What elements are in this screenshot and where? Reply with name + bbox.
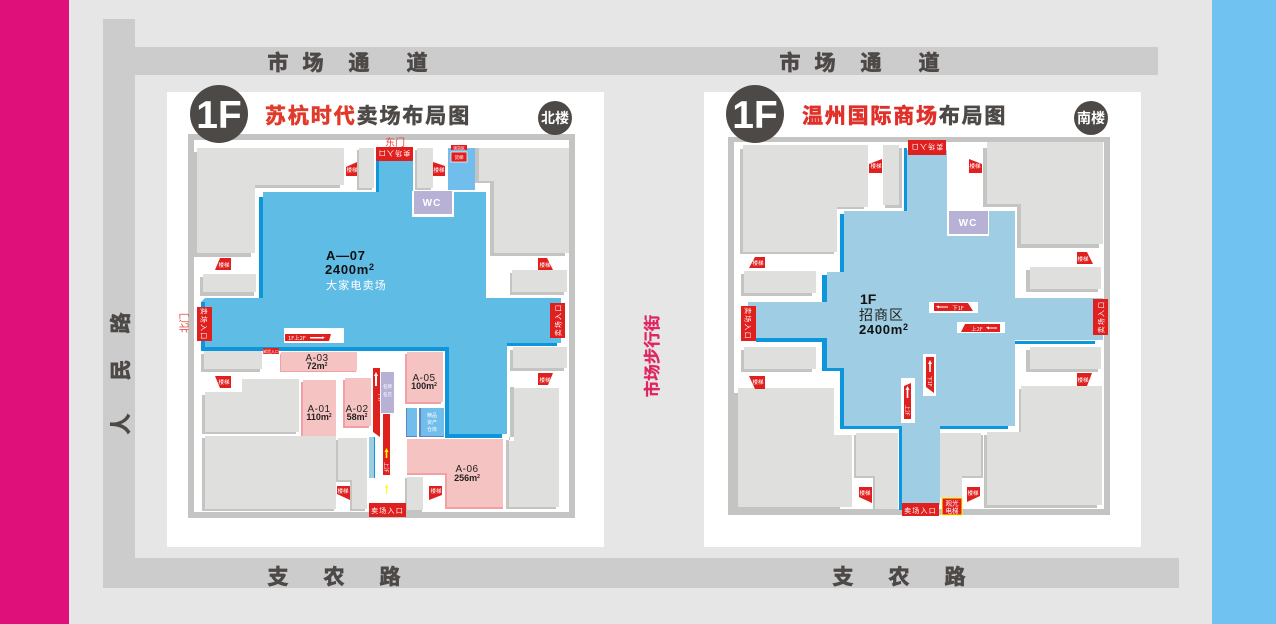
unit A-06: A-06 xyxy=(455,464,479,475)
entrance bottom xyxy=(902,503,939,516)
entrance top xyxy=(376,147,413,161)
escalator sign 上2F horizontal: 上2F xyxy=(971,325,983,333)
WC xyxy=(947,210,989,236)
label: 1F 招商区: 1F xyxy=(860,291,877,307)
stair icons: 楼梯 xyxy=(1077,255,1089,263)
road label: 市场通道 east: 通 xyxy=(860,47,882,77)
stair icons: 楼梯 xyxy=(337,487,349,495)
sightseeing elevator xyxy=(942,498,962,515)
WC xyxy=(412,191,454,217)
entrance right: 卖场入口 xyxy=(554,304,564,336)
storage block: 领货区 xyxy=(453,144,465,152)
sales area blue edge lines xyxy=(201,155,557,438)
road label: 支农路 east xyxy=(832,561,966,591)
label: A-07: A—07 xyxy=(326,248,366,263)
escalator sign 上2F vertical: 上2F xyxy=(904,405,910,416)
entrance top: 卖场入口 xyxy=(911,142,943,152)
badge: 南楼 xyxy=(1074,101,1108,135)
entrance bottom xyxy=(369,503,406,517)
panel: south building floor plan xyxy=(704,85,1141,547)
entrance right xyxy=(1093,299,1108,335)
unit A-05 xyxy=(405,352,443,404)
entrance left xyxy=(197,307,212,341)
unit A-03 xyxy=(280,352,357,372)
badge: 1F: 1F xyxy=(196,94,242,137)
unit A-06 xyxy=(407,439,503,509)
leasing area blue edge lines xyxy=(756,148,1095,510)
stair icons: 楼梯 xyxy=(430,487,442,495)
badge: 北楼 xyxy=(538,101,572,135)
road label: 市场通道 east: 道 xyxy=(918,47,940,77)
heading: 苏杭时代卖场布局图: 苏杭时代卖场布局图 xyxy=(265,100,471,130)
road label: 人民路: 人 xyxy=(105,414,135,434)
storage rooms: 精品 xyxy=(427,412,437,419)
road label: 支农路 east: 路 xyxy=(944,561,966,591)
road label: 人民路: 路 xyxy=(105,312,135,334)
storage block: 货梯 xyxy=(454,154,464,161)
gray building blocks xyxy=(194,148,569,512)
label: A-07: 2 xyxy=(369,262,375,272)
unit A-03: A-03 xyxy=(305,353,329,364)
north gate label: 北门 xyxy=(176,313,191,333)
badge: 1F xyxy=(726,85,784,143)
label: A-07: 2400m xyxy=(325,262,369,277)
road label: 市场通道 east: 市 xyxy=(780,47,800,77)
central escalator and display: 上2F xyxy=(382,462,390,473)
stair icons: 楼梯 xyxy=(1077,376,1089,384)
label: A-07: 大家电卖场 xyxy=(326,277,387,293)
WC: WC xyxy=(423,198,441,209)
escalator sign 下1F vertical: 下1F xyxy=(926,376,933,387)
entrance bottom: 卖场入口 xyxy=(371,506,404,516)
escalator sign 下1F horizontal xyxy=(929,302,978,313)
left magenta side band xyxy=(0,0,69,624)
central escalator and display: 名店 xyxy=(383,391,392,398)
entrance right: 卖场入口 xyxy=(1096,301,1106,333)
road label: 支农路 west: 农 xyxy=(324,561,344,591)
central escalator and display xyxy=(369,368,394,494)
badge: 南楼: 南楼 xyxy=(1077,108,1105,128)
entrance bottom: 卖场入口 xyxy=(904,506,937,516)
badge: 1F: 1F xyxy=(732,94,778,137)
label: 1F 招商区: 2 xyxy=(903,322,909,332)
stair icons: 楼梯 xyxy=(967,489,979,497)
label: A-07 xyxy=(325,248,387,293)
stair icons: 楼梯 xyxy=(346,166,358,174)
right sky-blue side band xyxy=(1212,0,1276,624)
sightseeing elevator: 观光 xyxy=(946,498,959,508)
storage rooms xyxy=(406,408,444,437)
entrance left: 卖场入口 xyxy=(742,307,752,340)
road label: 市场通道 east xyxy=(780,47,940,77)
central escalator and display: 名牌 xyxy=(383,383,392,390)
unit A-02: 2 xyxy=(365,413,368,419)
unit A-06: 2 xyxy=(477,474,480,480)
road label: 支农路 west: 路 xyxy=(380,561,400,591)
entrance left: 卖场入口 xyxy=(198,308,208,340)
label: 1F 招商区: 招商区 xyxy=(859,305,904,325)
label: 1F 招商区: 2400m xyxy=(859,322,903,337)
east gate label: 东门 xyxy=(385,134,405,149)
stair icons: 楼梯 xyxy=(859,489,871,497)
storage rooms: 资产 xyxy=(427,419,437,426)
unit A-05: A-05 xyxy=(412,373,436,384)
road label: 人民路 xyxy=(105,312,135,434)
unit A-05: 2 xyxy=(434,382,437,388)
unit A-02: 58m xyxy=(347,412,365,422)
unit A-02 xyxy=(343,378,371,428)
stair icons: 楼梯 xyxy=(969,162,981,170)
sightseeing elevator: 电梯 xyxy=(946,505,959,515)
unit A-03: 72m xyxy=(307,361,325,371)
road label: 市场通道 west: 市 xyxy=(268,47,288,77)
heading: 温州国际商场布局图: 温州国际商场布局图 xyxy=(802,100,1007,130)
road label: 支农路 east: 支 xyxy=(832,561,854,591)
stair icons: 楼梯 xyxy=(433,166,445,174)
escalator sign 上2F horizontal xyxy=(957,322,1005,333)
storage block xyxy=(448,144,475,190)
entrance top: 卖场入口 xyxy=(378,148,410,158)
escalator sign 1F上2F xyxy=(284,328,344,343)
escalator sign 下1F horizontal: 下1F xyxy=(952,304,964,312)
road label: 市场通道 west xyxy=(268,47,428,77)
stair icons: 楼梯 xyxy=(218,378,230,386)
unit A-01 xyxy=(301,380,336,436)
badge: 1F xyxy=(190,85,248,143)
badge: 北楼: 北楼 xyxy=(541,108,569,128)
road label: 市场通道 west: 通 xyxy=(348,47,370,77)
stair icons: 楼梯 xyxy=(539,376,551,384)
unit A-06: 256m xyxy=(454,473,477,483)
road label: 市场通道 east: 场 xyxy=(814,47,836,77)
road label: 支农路 west xyxy=(268,561,400,591)
escalator sign 1F上2F: 1F上2F xyxy=(288,334,306,342)
stair icons xyxy=(215,162,553,500)
unit A-03: 2 xyxy=(325,362,328,368)
storage rooms: 仓库 xyxy=(427,426,437,433)
stair icons: 楼梯 xyxy=(539,261,551,269)
sales area A-07 xyxy=(201,148,561,434)
road label: 市场通道 west: 道 xyxy=(406,47,428,77)
road label: 支农路 east: 农 xyxy=(888,561,910,591)
label: 1F 招商区 xyxy=(859,291,909,337)
central escalator and display: 下1F xyxy=(376,392,384,403)
road label: 支农路 west: 支 xyxy=(268,561,288,591)
WC: WC xyxy=(959,218,977,229)
road network xyxy=(103,19,1179,588)
stair icons: 楼梯 xyxy=(752,259,764,267)
panel: north building floor plan xyxy=(167,85,604,547)
stair icons: 楼梯 xyxy=(752,378,764,386)
street label: 市场步行街: 市场步行街 xyxy=(639,315,663,397)
stair icons xyxy=(749,159,1093,503)
leasing area xyxy=(748,150,1103,505)
stair icons: 楼梯 xyxy=(218,261,230,269)
stair icons: 楼梯 xyxy=(870,162,882,170)
unit A-02: A-02 xyxy=(345,404,369,415)
unit A-01: 2 xyxy=(329,413,332,419)
stair icons: 卸货入口 xyxy=(263,348,279,355)
gray building blocks xyxy=(728,142,1103,509)
entrance right xyxy=(550,303,565,338)
floor frame xyxy=(728,137,1110,515)
unit A-01: 110m xyxy=(306,412,329,422)
escalator sign 下1F vertical xyxy=(923,354,936,396)
entrance left xyxy=(741,306,756,341)
unit A-05: 100m xyxy=(411,381,434,391)
entrance top xyxy=(908,140,946,155)
road label: 市场通道 west: 场 xyxy=(302,47,324,77)
road label: 人民路: 民 xyxy=(105,360,135,380)
unit A-01: A-01 xyxy=(307,404,331,415)
floor frame xyxy=(188,134,575,518)
escalator sign 上2F vertical xyxy=(901,378,915,423)
